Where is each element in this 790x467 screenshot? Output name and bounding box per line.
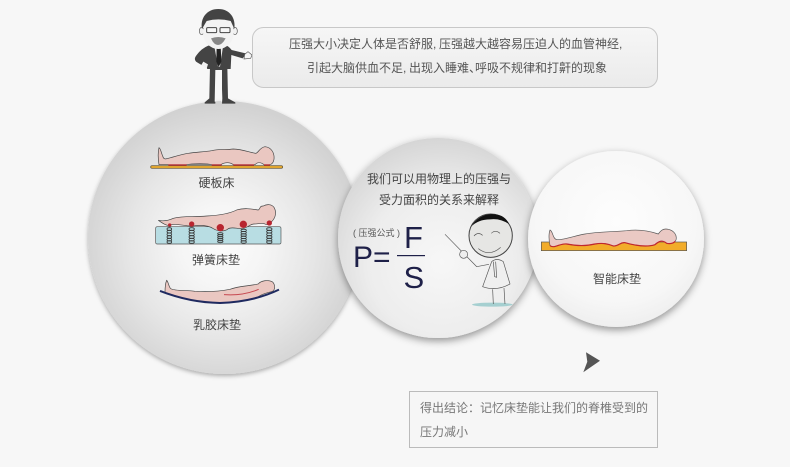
illustration: body on hard board <box>151 147 283 168</box>
panel: hard surfaces circle <box>88 101 361 374</box>
label: hard board: 硬板床 <box>198 176 235 190</box>
illustration: body on latex mattress <box>160 280 279 303</box>
illustration: body on spring mattress <box>156 205 281 244</box>
pressure formula: F <box>404 220 423 255</box>
pressure formula: S <box>404 260 424 295</box>
callout: speech bubble: 压强越大越容易压迫人的血管神经, <box>439 36 622 51</box>
label: spring mattress: 弹簧床垫 <box>192 252 240 267</box>
arrow: pointing to conclusion <box>583 352 600 372</box>
icon: businessman cartoon <box>195 9 252 104</box>
panel: smart mattress circle <box>528 151 704 327</box>
pressure formula <box>353 220 425 295</box>
callout: conclusion box: 得出结论：记忆床垫能让我们的脊椎受到的 <box>420 400 648 415</box>
callout: speech bubble <box>252 28 658 88</box>
label: smart mattress: 智能床垫 <box>593 271 641 286</box>
callout: speech bubble: 出现入睡难、 <box>409 61 481 75</box>
label: latex mattress: 乳胶床垫 <box>193 317 241 332</box>
callout: conclusion box <box>410 392 658 448</box>
illustration: body on smart mattress <box>541 229 687 251</box>
explanation text <box>367 171 511 207</box>
explanation text: 我们可以用物理上的压强与 <box>367 171 511 186</box>
callout: speech bubble: 引起大脑供血不足, <box>307 61 406 75</box>
callout: speech bubble: 压强大小决定人体是否舒服, <box>289 36 436 51</box>
icon: teacher cartoon <box>445 214 513 307</box>
callout: speech bubble: 呼吸不规律和打鼾的现象 <box>475 60 607 75</box>
callout: conclusion box: 压力减小 <box>420 425 468 439</box>
panel: pressure formula circle <box>338 138 538 338</box>
explanation text: 受力面积的关系来解释 <box>379 192 499 207</box>
pressure formula: P= <box>353 241 391 274</box>
pressure formula: ( 压强公式 ) <box>353 227 400 238</box>
